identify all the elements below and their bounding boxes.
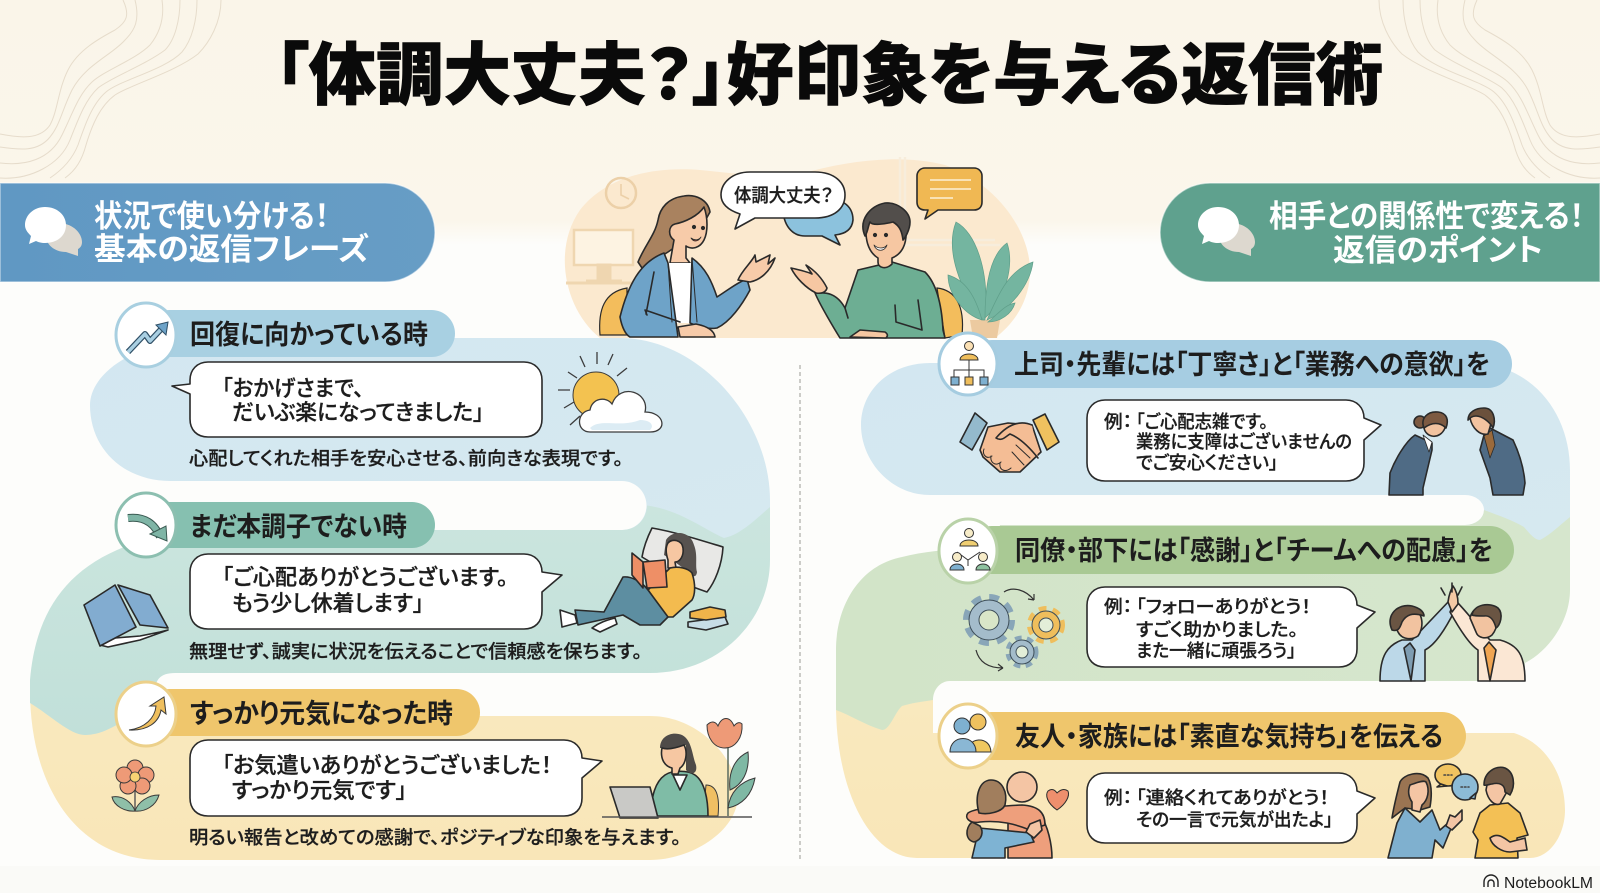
card: not fully recovered (84, 493, 728, 662)
reply bubble: また一緒に頑張ろう」 (1136, 641, 1296, 661)
woman (620, 196, 775, 337)
icon: chat bubbles (1198, 207, 1255, 256)
reply bubble (1087, 400, 1381, 481)
reply bubble: もう少し休着します」 (232, 591, 424, 616)
panel: teal band (30, 506, 770, 735)
NotebookLM credit: NotebookLM (1504, 875, 1593, 892)
reply bubble (190, 740, 602, 816)
reply bubble: その一言で元気が出たよ」 (1136, 809, 1333, 830)
illustration: woman at laptop with tulip (602, 718, 755, 818)
reply bubble: 「連絡くれてありがとう！ (1136, 787, 1329, 808)
illustration: two people chatting (1388, 764, 1528, 858)
title: 「体調大丈夫？」好印象を与える返信術 (275, 38, 1383, 114)
label pill (146, 689, 480, 736)
reply bubble: すっかり元気です」 (232, 778, 407, 803)
reply bubble: 「おかげさまで、 (222, 376, 364, 401)
illustration: woman reading (560, 528, 728, 632)
clock (606, 178, 636, 208)
icon: curved down arrow (116, 493, 176, 557)
description: 明るい報告と改めての感謝で、ポジティブな印象を与えます。 (189, 827, 681, 848)
blue speech bubble (783, 199, 853, 245)
right section header: 相手との関係性で変える！ (1269, 199, 1584, 234)
description: 心配してくれた相手を安心させる、前向きな表現です。 (189, 448, 623, 469)
white speech bubble (721, 172, 845, 229)
illustration: hugging pair (967, 772, 1069, 858)
reply bubble: 「ご心配志雑です。 (1136, 412, 1268, 432)
left section header: 状況で使い分ける！ (94, 199, 329, 234)
icon: team (939, 519, 997, 583)
icon: sun and cloud (558, 352, 662, 432)
card: fully recovered: すっかり元気になった時 (190, 699, 453, 729)
icon: handshake (960, 413, 1059, 472)
reply bubble: すごく助かりました。 (1136, 620, 1298, 640)
reply bubble: 例： (1104, 788, 1132, 808)
man (791, 203, 945, 338)
card: colleagues (939, 519, 1525, 681)
left section header: 基本の返信フレーズ (94, 232, 369, 267)
reply bubble (1087, 773, 1375, 843)
reply bubble: 「お気遣いありがとうございました！ (222, 753, 552, 778)
reply bubble: 業務に支障はございませんの (1136, 431, 1352, 452)
reply bubble (190, 554, 562, 629)
icon: two people (939, 704, 997, 768)
card: boss and seniors: 上司・先輩には「丁寧さ」と「業務への意欲」を (1014, 350, 1490, 380)
card: friends and family: 友人・家族には「素直な気持ち」を伝える (1015, 722, 1443, 752)
icon: rising trend (116, 303, 176, 367)
panel: yellow band (30, 690, 738, 860)
panel: right flow blocks (836, 363, 1570, 858)
icon: flower (112, 760, 159, 811)
label pill (146, 502, 435, 548)
illustration: high five (1380, 583, 1525, 681)
white speech bubble: 体調大丈夫？ (734, 185, 833, 206)
icon: rising arrow (116, 682, 176, 746)
icon: org chart (939, 333, 997, 395)
central illustration: two people talking (565, 157, 1033, 338)
reply bubble (172, 362, 542, 437)
panel: blue band (90, 338, 770, 560)
right section header: 返信のポイント (1333, 233, 1543, 268)
label pill (968, 340, 1512, 388)
card: fully recovered (112, 682, 755, 848)
reply bubble: 「フォローありがとう！ (1136, 596, 1311, 617)
panel: blue band (861, 363, 1570, 560)
panel: left flow blocks (30, 338, 770, 860)
reply bubble: 例： (1104, 597, 1132, 617)
card: recovering (116, 303, 662, 469)
label pill (968, 712, 1466, 760)
chairs (600, 288, 627, 335)
card: not fully recovered: まだ本調子でない時 (190, 512, 407, 542)
card: boss and seniors (939, 333, 1525, 495)
reply bubble: でご安心ください」 (1136, 453, 1278, 473)
orange note bubble (917, 168, 982, 219)
divider (799, 365, 801, 860)
card: colleagues: 同僚・部下には「感謝」と「チームへの配慮」を (1015, 536, 1493, 566)
description: 無理せず、誠実に状況を伝えることで信頼感を保ちます。 (189, 641, 642, 662)
reply bubble (1087, 587, 1375, 667)
plant (948, 222, 1033, 338)
left section header (0, 183, 435, 282)
reply bubble: だいぶ楽になってきました」 (232, 400, 484, 425)
reply bubble: 例： (1104, 412, 1132, 432)
right section header (1160, 183, 1600, 282)
icon: open book (84, 585, 168, 647)
card: recovering: 回復に向かっている時 (190, 320, 428, 350)
reply bubble: 「ご心配ありがとうございます。 (222, 565, 508, 590)
panel: green band (836, 510, 1570, 730)
illustration: two people bowing (1389, 408, 1525, 495)
label pill (968, 526, 1514, 574)
icon: chat bubbles (25, 207, 82, 256)
monitor (566, 230, 640, 283)
card: friends and family (939, 704, 1528, 858)
label pill (146, 310, 455, 357)
panel: yellow band (836, 700, 1565, 858)
icon: gears (968, 589, 1061, 671)
